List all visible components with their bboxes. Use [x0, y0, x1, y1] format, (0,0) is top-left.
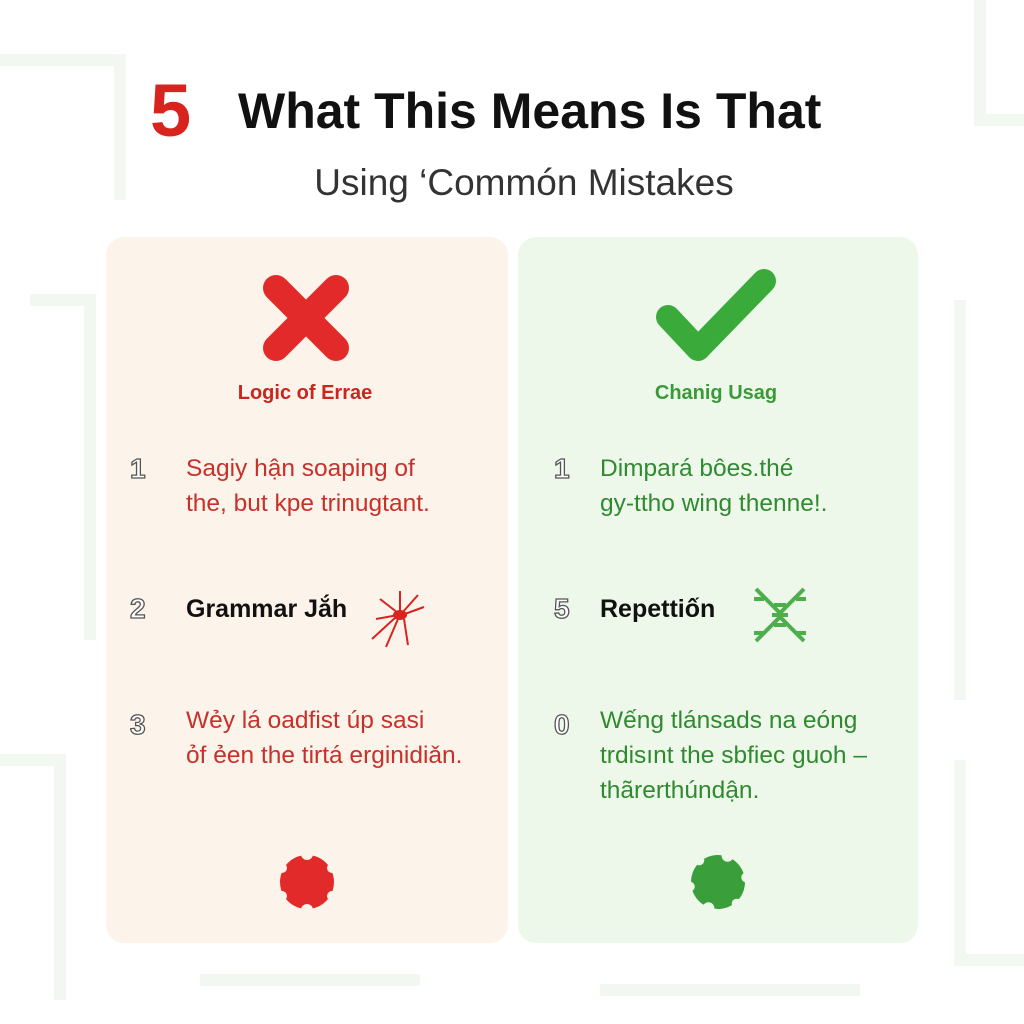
item 1	[130, 453, 430, 517]
item 1	[554, 453, 827, 517]
icon: spider	[371, 591, 424, 648]
item 3	[130, 707, 462, 769]
subtitle: Using ‘Commón Mistakes	[314, 162, 734, 203]
item 3: ỏf ẻen the tirtá erginidiǎn.	[186, 742, 462, 769]
item 2: 2	[130, 593, 146, 624]
item 1: 1	[554, 453, 570, 484]
item 2: Grammar Jắh	[186, 595, 347, 623]
item 1: gy-ttho wing thenne!.	[600, 490, 827, 517]
item 1: Dimpará bôes.thé	[600, 455, 793, 482]
item 1: the, but kpe trinugtant.	[186, 490, 430, 517]
icon: green puzzle	[691, 855, 745, 909]
item 3: Wếng tlánsads na eóng	[600, 707, 857, 734]
title: What This Means Is That	[238, 83, 821, 139]
title: 5	[150, 69, 191, 152]
panel: mistakes	[106, 237, 508, 943]
item 1: 1	[130, 453, 146, 484]
item 2: Repettiốn	[600, 595, 715, 623]
item 2	[554, 588, 806, 642]
item 3: thãrerthúndận.	[600, 777, 759, 804]
label: Chanig Usag: Chanig Usag	[655, 382, 777, 404]
icon: green dna	[754, 588, 806, 642]
item 3: Wẻy lá oadfist úp sasi	[186, 707, 424, 734]
title	[150, 69, 821, 152]
icon: red puzzle	[280, 856, 334, 908]
icon: check	[656, 269, 776, 361]
item 3: 0	[554, 709, 570, 740]
label: Logic of Errae: Logic of Errae	[238, 382, 372, 404]
item 3: trdisınt the sbfiec guoh –	[600, 742, 867, 769]
item 3: 3	[130, 709, 146, 740]
item 2: 5	[554, 593, 570, 624]
item 1: Sagiy hận soaping of	[186, 455, 415, 482]
item 2	[130, 591, 424, 648]
item 3	[554, 707, 867, 804]
panel: corrections	[518, 237, 918, 943]
icon: cross	[263, 275, 349, 361]
